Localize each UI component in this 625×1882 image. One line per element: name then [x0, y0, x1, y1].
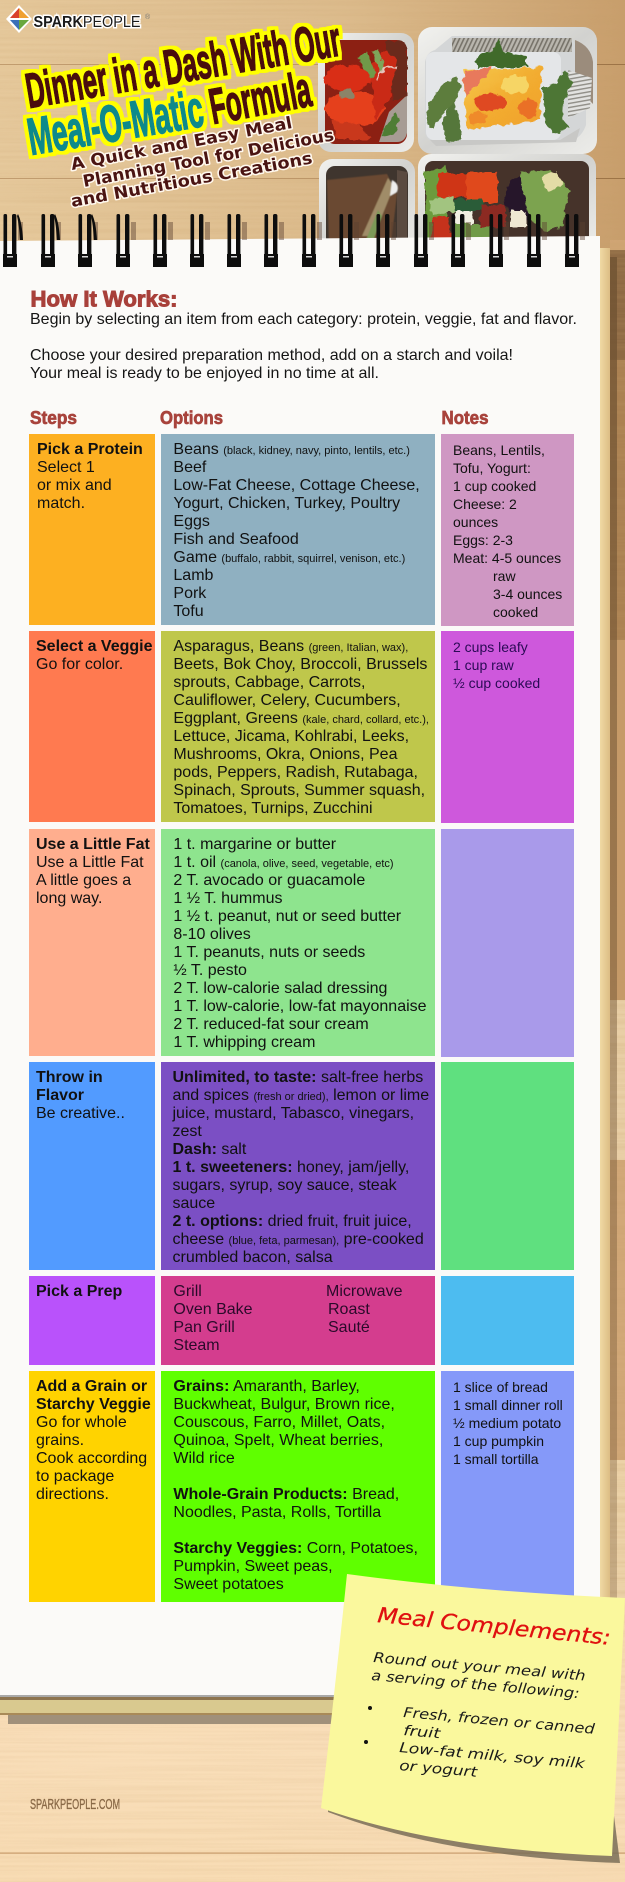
options: preparation methods: Grill	[173, 1283, 202, 1300]
step: Add a Grain or Starchy Veggie: Starchy Veggie	[36, 1396, 151, 1413]
notes: grain portions: 1 slice of bread	[453, 1379, 548, 1395]
heading: How It Works: How It Works:	[30, 286, 178, 312]
subtitle	[69, 113, 336, 211]
options: flavors	[161, 1062, 435, 1270]
options: veggies: Tomatoes, Turnips, Zucchini	[173, 800, 373, 817]
options: grains: Sweet potatoes	[173, 1576, 284, 1593]
column headings: Options	[160, 408, 223, 428]
text: instructions: Begin by selecting an item from each category: protein, veggie, fat and flavor.	[30, 311, 577, 328]
options: proteins: Tofu	[173, 603, 204, 620]
options: flavors: crumbled bacon, salsa	[172, 1249, 333, 1266]
notes: grain portions: 1 small dinner roll	[453, 1397, 563, 1413]
step: Use a Little Fat	[29, 829, 155, 1056]
options: flavors: cheese (blue, feta, parmesan), pre-cooked	[172, 1231, 424, 1248]
step: Select a Veggie	[29, 631, 155, 822]
step: Use a Little Fat: Use a Little Fat	[36, 836, 150, 853]
options: preparation methods	[161, 1276, 435, 1365]
logo: SparkPeople: ®	[145, 13, 151, 21]
options: preparation methods: Microwave	[326, 1283, 402, 1300]
options: grains: Wild rice	[173, 1450, 235, 1467]
step: Add a Grain or Starchy Veggie: grains.	[36, 1432, 84, 1449]
text: instructions: Your meal is ready to be enjoyed in no time at all.	[30, 365, 379, 382]
step: Add a Grain or Starchy Veggie: Go for whole	[36, 1414, 127, 1431]
notes: protein portions: Cheese: 2	[453, 496, 517, 512]
note text: or yogurt	[399, 1758, 478, 1781]
notes: grain portions	[441, 1371, 574, 1602]
notes: protein portions: cooked	[493, 604, 538, 620]
note text: Low-fat milk, soy milk	[399, 1740, 586, 1772]
notes: grain portions: 1 small tortilla	[453, 1451, 539, 1467]
options: grains: Buckwheat, Bulgur, Brown rice,	[173, 1396, 395, 1413]
notes: flavors, empty	[441, 1062, 574, 1270]
step: Pick a Protein	[29, 434, 155, 625]
photo: tray with tomato salad	[318, 33, 414, 152]
options: grains: Quinoa, Spelt, Wheat berries,	[173, 1432, 383, 1449]
notes: grain portions: 1 cup pumpkin	[453, 1433, 544, 1449]
options: flavors: Dash: salt	[172, 1141, 246, 1158]
options: veggies: Mushrooms, Okra, Onions, Pea	[173, 746, 397, 763]
subtitle: and Nutritious Creations	[69, 148, 314, 211]
subtitle: Planning Tool for Delicious	[81, 125, 336, 191]
step: Add a Grain or Starchy Veggie: Add a Grain or	[36, 1378, 147, 1395]
note text: fruit	[403, 1723, 442, 1742]
options: veggies: Beets, Bok Choy, Broccoli, Brussels	[173, 656, 427, 673]
options: preparation methods: Roast	[328, 1301, 370, 1318]
step: Pick a Prep	[29, 1276, 155, 1365]
options: fats: 2 T. low-calorie salad dressing	[173, 980, 387, 997]
notes: protein portions: Beans, Lentils,	[453, 442, 545, 458]
step: Pick a Protein: or mix and	[37, 477, 112, 494]
options: veggies: Asparagus, Beans (green, Italian, wax),	[173, 638, 408, 655]
notes: protein portions: Eggs: 2-3	[453, 532, 513, 548]
title: Formula	[205, 61, 316, 135]
options: veggies	[161, 631, 435, 822]
notes: veggie portions: 1 cup raw	[453, 657, 514, 673]
options: flavors: sugars, syrup, soy sauce, steak	[172, 1177, 397, 1194]
options: fats: ½ T. pesto	[173, 962, 247, 979]
options: preparation methods: Sauté	[328, 1319, 370, 1336]
options: proteins: Fish and Seafood	[173, 531, 299, 548]
sticky note: Meal Complements	[321, 1574, 625, 1863]
notes: protein portions: raw	[493, 568, 516, 584]
notes: protein portions: 3-4 ounces	[493, 586, 562, 602]
step: Throw in Flavor: Be creative..	[36, 1105, 125, 1122]
icon: diamond mark	[6, 5, 32, 33]
photo: tray with lasagna	[418, 27, 597, 154]
step: Add a Grain or Starchy Veggie: directions.	[36, 1486, 109, 1503]
column headings: Notes	[442, 408, 488, 428]
photo: tray with greek salad	[418, 154, 596, 249]
options: grains: Starchy Veggies: Corn, Potatoes,	[173, 1540, 418, 1557]
options: fats: 8-10 olives	[173, 926, 251, 943]
options: preparation methods: Steam	[173, 1337, 220, 1354]
options: proteins: Low-Fat Cheese, Cottage Cheese,	[173, 477, 420, 494]
logo: SparkPeople	[6, 5, 151, 33]
step: Pick a Protein: Select 1	[37, 459, 95, 476]
subtitle: A Quick and Easy Meal	[69, 113, 294, 174]
title: Meal-O-Matic	[23, 80, 208, 167]
options: flavors: juice, mustard, Tabasco, vinegars,	[172, 1105, 414, 1122]
column headings: Steps	[30, 408, 77, 428]
note text	[364, 1650, 595, 1781]
options: proteins: Eggs	[173, 513, 210, 530]
notes: protein portions	[441, 434, 574, 626]
step: Use a Little Fat: Use a Little Fat	[36, 854, 144, 871]
note text: a serving of the following:	[371, 1668, 580, 1702]
wood: top	[0, 0, 625, 300]
options: fats: 1 T. low-calorie, low-fat mayonnaise	[173, 998, 427, 1015]
step: Add a Grain or Starchy Veggie: to package	[36, 1468, 114, 1485]
logo: SparkPeople: SPARKPEOPLE	[34, 14, 140, 31]
notebook paper	[0, 236, 600, 1696]
notebook shadow	[8, 257, 617, 1724]
step: Select a Veggie: Select a Veggie	[36, 638, 153, 655]
note text: Fresh, frozen or canned	[403, 1705, 595, 1738]
step: Pick a Prep: Pick a Prep	[36, 1283, 122, 1300]
options: flavors: 1 t. sweeteners: honey, jam/jelly,	[172, 1159, 409, 1176]
options: fats: 1 ½ t. peanut, nut or seed butter	[173, 908, 401, 925]
options: fats: 2 T. avocado or guacamole	[173, 872, 365, 889]
notes: fats, empty	[441, 829, 574, 1057]
text: instructions	[30, 311, 577, 382]
options: veggies: Lettuce, Jicama, Kohlrabi, Leeks,	[173, 728, 409, 745]
options: veggies: Spinach, Sprouts, Summer squash,	[173, 782, 425, 799]
options: proteins: Beef	[173, 459, 206, 476]
options: proteins: Pork	[173, 585, 206, 602]
options: flavors: Unlimited, to taste: salt-free herbs	[172, 1069, 423, 1086]
options: fats: 1 T. whipping cream	[173, 1034, 315, 1051]
step: Throw in Flavor: Flavor	[36, 1087, 84, 1104]
options: proteins: Lamb	[173, 567, 213, 584]
options: veggies: pods, Peppers, Radish, Rutabaga,	[173, 764, 418, 781]
options: veggies: sprouts, Cabbage, Carrots,	[173, 674, 365, 691]
notes: prep, empty	[441, 1276, 574, 1365]
notes: grain portions: ½ medium potato	[453, 1415, 561, 1431]
notes: veggie portions: 2 cups leafy	[453, 639, 528, 655]
options: grains: Pumpkin, Sweet peas,	[173, 1558, 333, 1575]
step: Throw in Flavor: Throw in	[36, 1069, 103, 1086]
options: proteins: Game (buffalo, rabbit, squirrel, venison, etc.)	[173, 549, 405, 566]
options: grains: Noodles, Pasta, Rolls, Tortilla	[173, 1504, 381, 1521]
wood: bottom	[0, 1600, 625, 1882]
options: fats: 2 T. reduced-fat sour cream	[173, 1016, 369, 1033]
step: Add a Grain or Starchy Veggie: Cook according	[36, 1450, 147, 1467]
options: fats: 1 t. oil (canola, olive, seed, vegetable, etc)	[173, 854, 394, 871]
options: grains	[161, 1371, 435, 1602]
notebook back pages	[0, 248, 610, 1715]
notes: protein portions: Tofu, Yogurt:	[453, 460, 531, 476]
notes: protein portions: ounces	[453, 514, 498, 530]
options: fats: 1 t. margarine or butter	[173, 836, 336, 853]
notes: veggie portions: ½ cup cooked	[453, 675, 540, 691]
step: Pick a Protein: match.	[37, 495, 85, 512]
notes: veggie portions	[441, 631, 574, 823]
options: veggies: Cauliflower, Celery, Cucumbers,	[173, 692, 401, 709]
notes: protein portions: 1 cup cooked	[453, 478, 536, 494]
text: instructions: Choose your desired preparation method, add on a starch and voila!	[30, 347, 513, 364]
options: flavors: and spices (fresh or dried), lemon or lime	[172, 1087, 429, 1104]
options: flavors: 2 t. options: dried fruit, fruit juice,	[172, 1213, 412, 1230]
options: flavors: zest	[172, 1123, 202, 1140]
notes: protein portions: Meat: 4-5 ounces	[453, 550, 561, 566]
options: grains: Whole-Grain Products: Bread,	[173, 1486, 399, 1503]
footer url: SPARKPEOPLE.COM	[30, 1796, 120, 1813]
options: preparation methods: Oven Bake	[173, 1301, 253, 1318]
note text: Round out your meal with	[373, 1650, 586, 1685]
step: Select a Veggie: Go for color.	[36, 656, 123, 673]
wood: right side	[610, 240, 625, 1600]
options: preparation methods: Pan Grill	[173, 1319, 235, 1336]
options: proteins	[161, 434, 435, 625]
options: fats: 1 T. peanuts, nuts or seeds	[173, 944, 365, 961]
step: Throw in Flavor	[29, 1062, 155, 1270]
spiral binding	[3, 214, 585, 267]
step: Use a Little Fat: A little goes a	[36, 872, 131, 889]
options: proteins: Yogurt, Chicken, Turkey, Poultry	[173, 495, 400, 512]
options: veggies: Eggplant, Greens (kale, chard, collard, etc.),	[173, 710, 429, 727]
step: Add a Grain or Starchy Veggie	[29, 1371, 155, 1602]
note heading: Meal Complements:	[377, 1603, 612, 1650]
options: grains: Grains: Amaranth, Barley,	[173, 1378, 360, 1395]
column headings	[30, 408, 488, 428]
photo: tray with sandwich	[319, 159, 415, 254]
options: flavors: sauce	[172, 1195, 215, 1212]
step: Use a Little Fat: long way.	[36, 890, 102, 907]
step: Pick a Protein: Pick a Protein	[37, 441, 143, 458]
options: grains: Couscous, Farro, Millet, Oats,	[173, 1414, 385, 1431]
options: fats	[161, 829, 435, 1056]
options: fats: 1 ½ T. hummus	[173, 890, 282, 907]
options: proteins: Beans (black, kidney, navy, pinto, lentils, etc.)	[173, 441, 410, 458]
